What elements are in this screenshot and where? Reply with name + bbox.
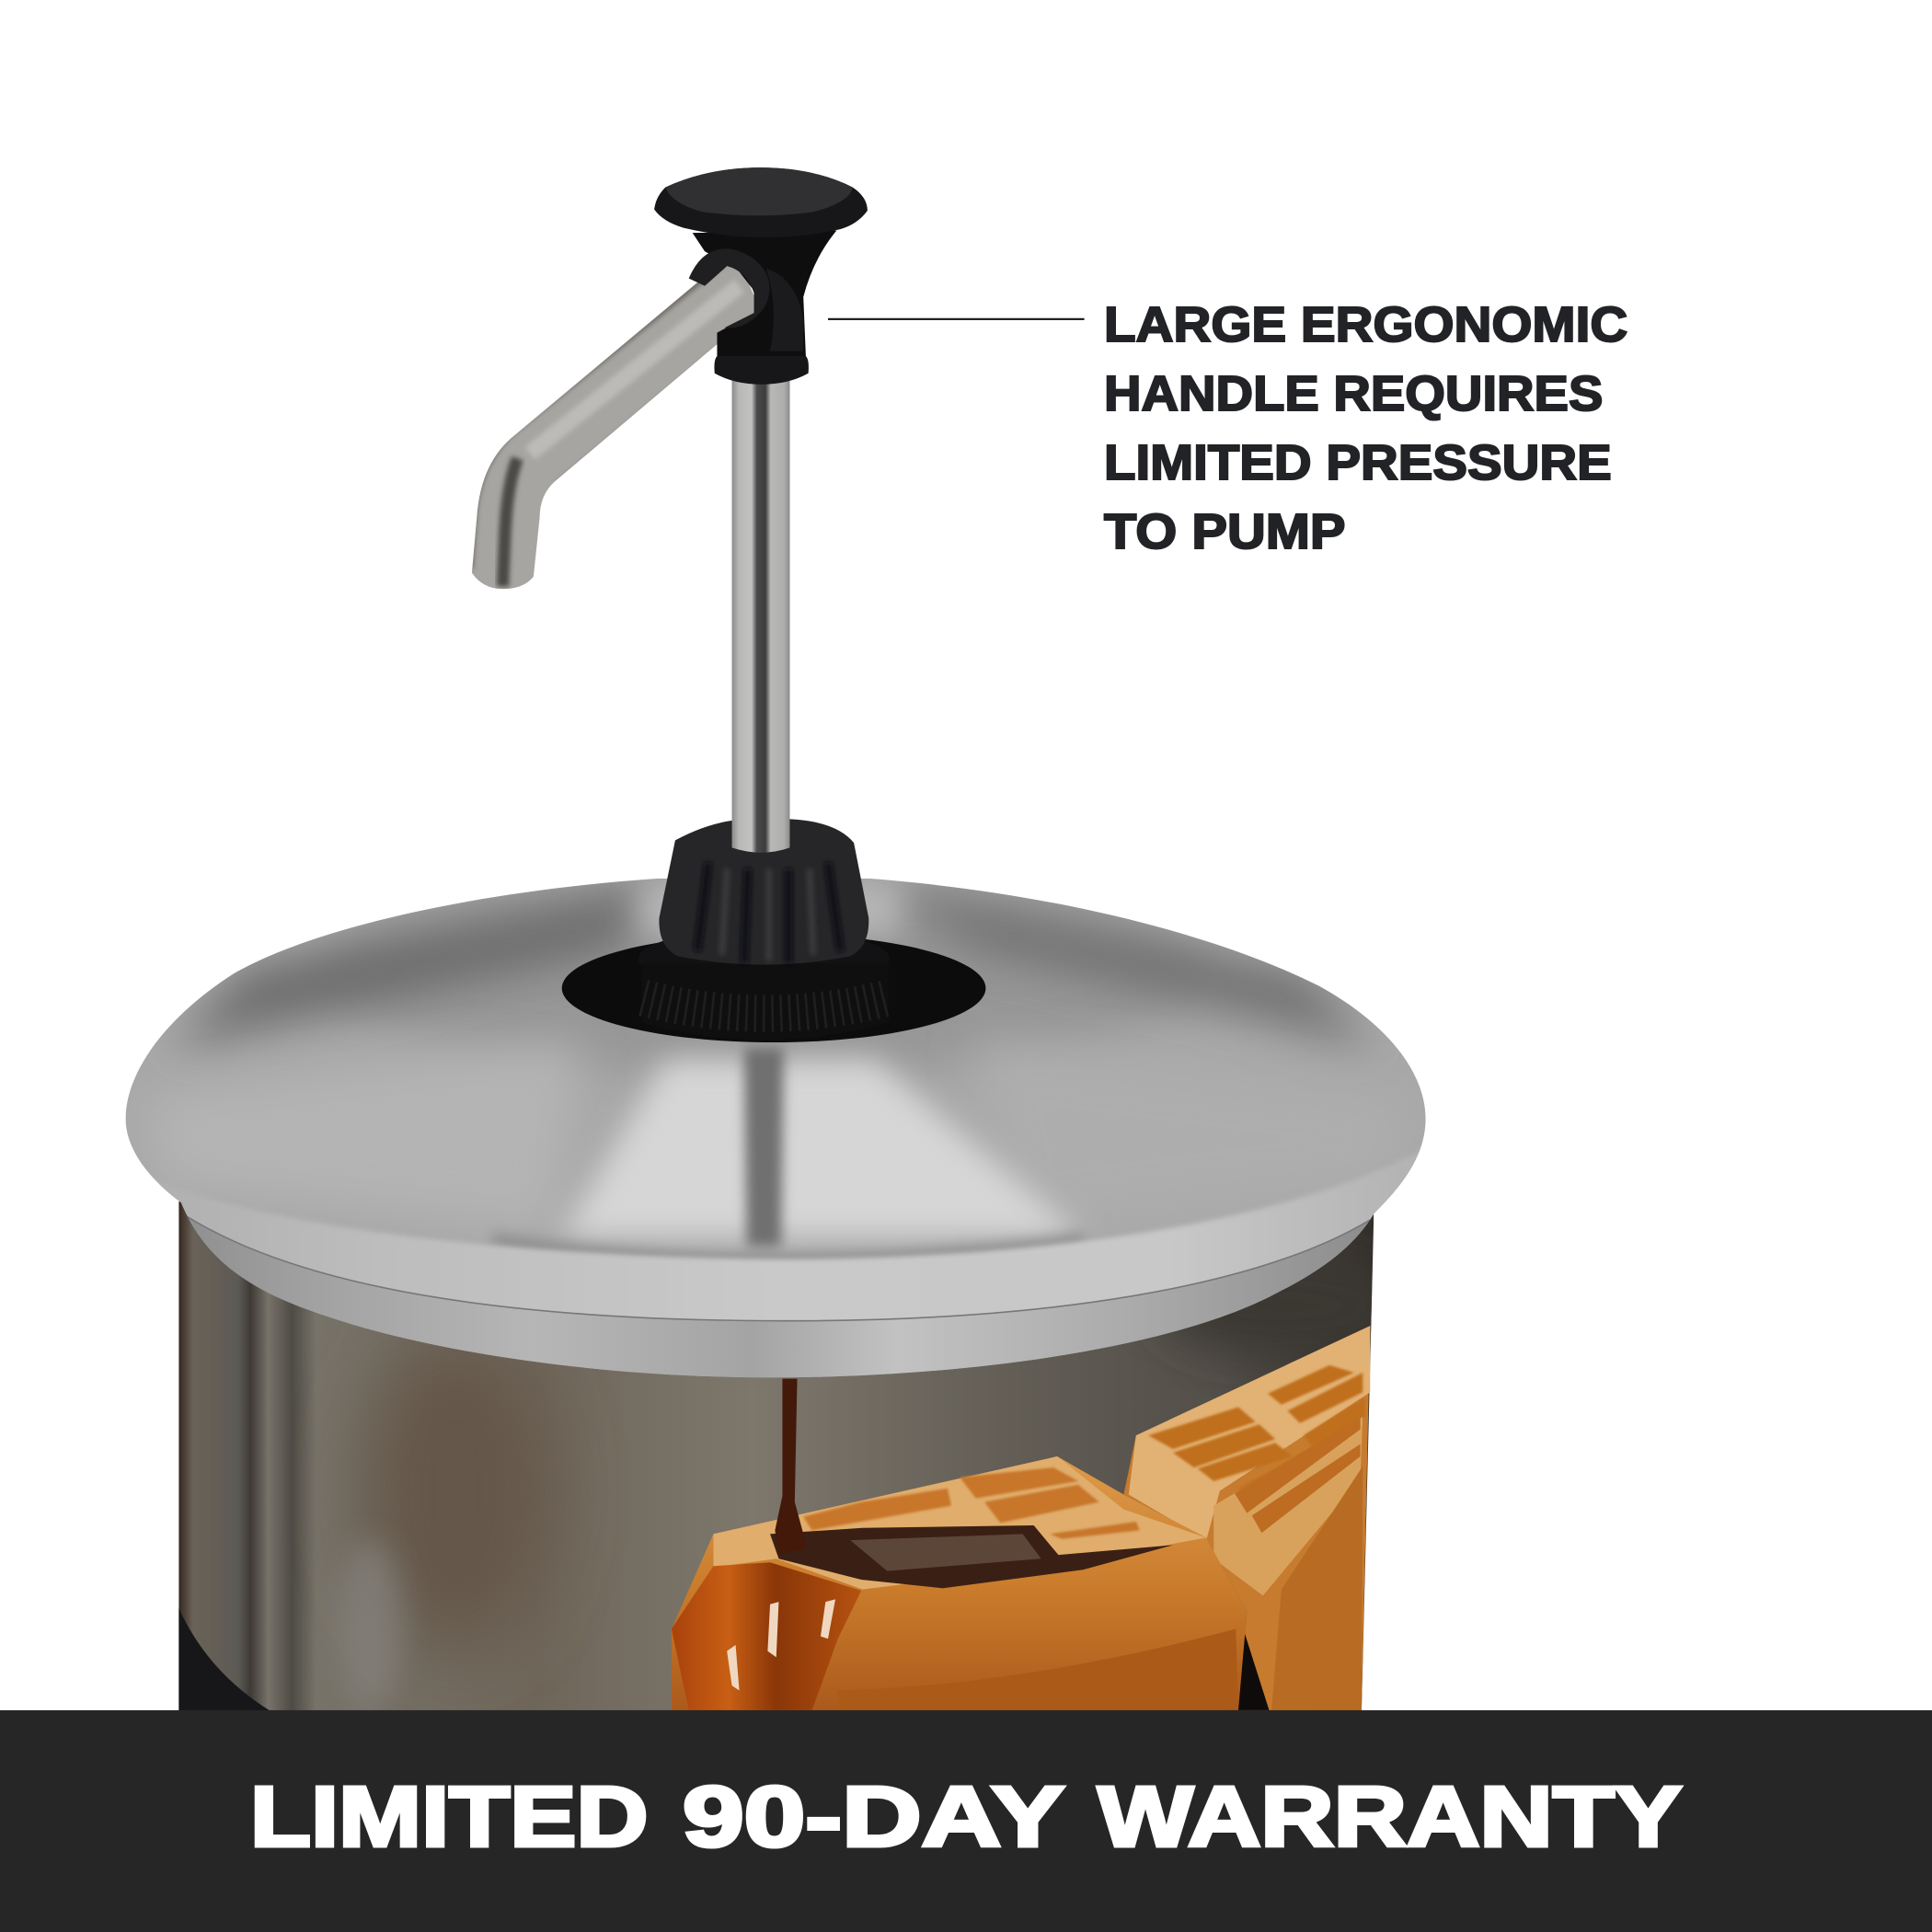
handle [654,167,868,385]
syrup stream [775,1379,807,1555]
lid front cone highlight [560,1060,1085,1238]
handle cap [654,167,868,237]
banner text: LIMITED [250,1768,648,1864]
pump [468,167,890,1040]
callout text: LARGE ERGONOMIC [1104,298,1627,352]
lid hem [155,1152,1419,1320]
syrup pool [770,1525,1173,1588]
syrup run [672,1562,861,1710]
lid [111,863,1442,1392]
waffle picture [672,1326,1370,1710]
front waffle [672,1456,1247,1710]
bottom collar [714,356,809,385]
lid base [111,863,1442,1392]
lid lower band [173,1213,1380,1386]
spout tube [468,261,756,589]
pump stem [732,375,789,853]
right waffle stack [1123,1326,1370,1710]
canister body [178,1202,1405,1715]
lid central stripe [744,1047,784,1247]
lid front shadow [491,1229,1086,1260]
threaded ring [638,929,890,1040]
lid mid ring shading [167,1036,576,1214]
tube collar [689,248,769,328]
callout text: HANDLE REQUIRES [1104,367,1603,421]
lid opening [562,934,985,1042]
handle neck and elbow [693,230,836,356]
callout text: TO PUMP [1104,505,1345,559]
bottom banner [0,1710,1932,1932]
banner text: 90-DAY [683,1768,1064,1864]
callout line [828,318,1085,320]
callout text: LIMITED PRESSURE [1104,436,1612,490]
adjustment knob [659,819,868,965]
banner text [250,1768,1682,1864]
callout text [1104,298,1627,559]
lid upper shading [361,879,1179,1071]
banner text: WARRANTY [1098,1768,1682,1864]
lid dark wedges [173,887,653,1047]
